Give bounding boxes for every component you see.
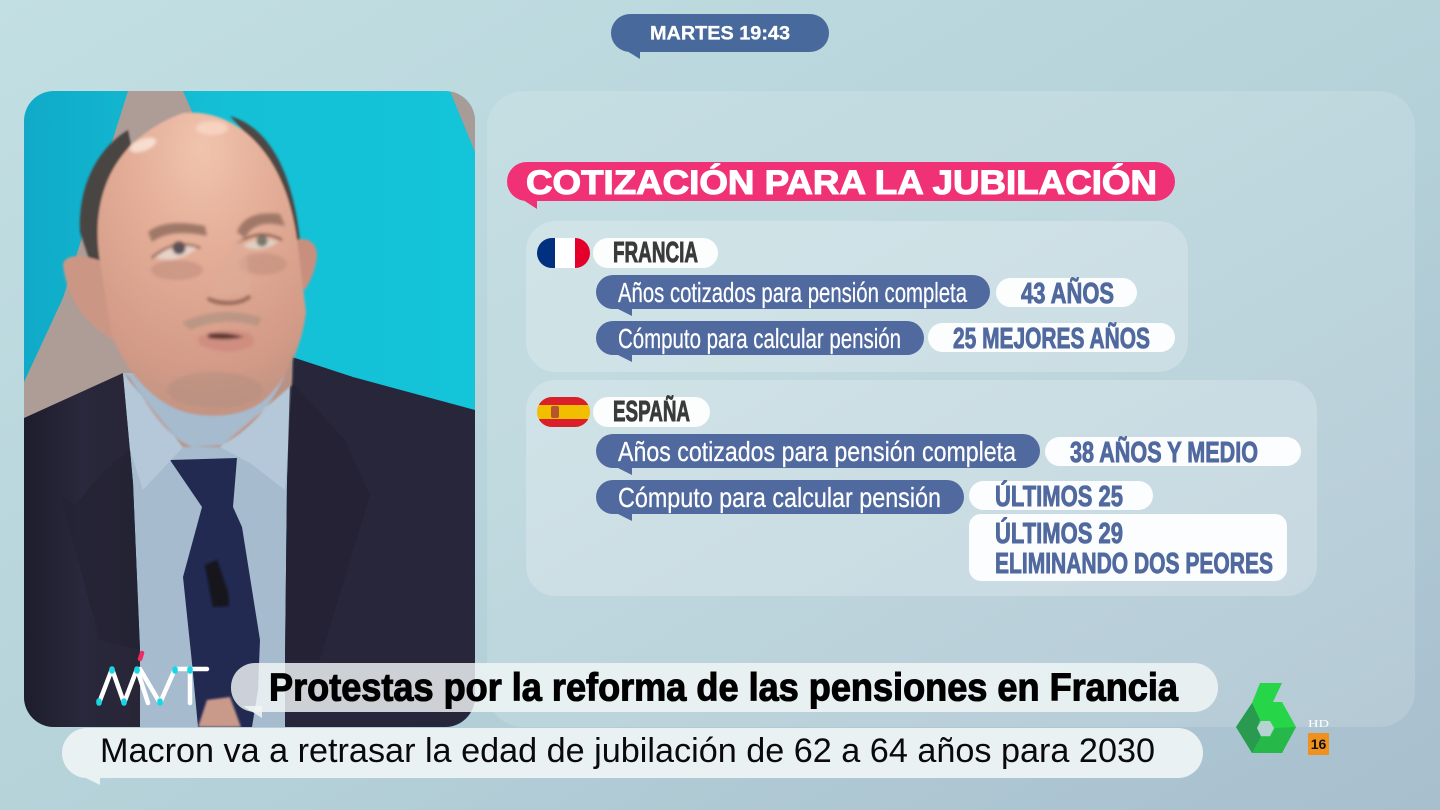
row: cómputo Francia: Cómputo para calcular pensión [618,323,901,354]
icon: French flag [537,238,590,268]
subheadline banner: Macron va a retrasar la edad de jubilación de 62 a 64 años para 2030 [100,732,1155,770]
row: cómputo España [596,480,964,521]
value: últimos 29 eliminando dos peores: ÚLTIMOS 29 [995,516,1123,550]
photo: speaker portrait [24,91,475,727]
country label: España [593,394,710,428]
row: años cotizados Francia: Años cotizados para pensión completa [618,277,967,308]
age rating badge: 16 [1311,736,1326,752]
value: últimos 25: ÚLTIMOS 25 [995,479,1123,513]
icon: channel logo 6 [1236,683,1296,753]
row: cómputo España: Cómputo para calcular pensión [618,482,941,513]
country label: España: ESPAÑA [613,394,690,428]
headline banner: Protestas por la reforma de las pensiones en Francia [269,666,1178,710]
icon: MVT logo [99,653,207,703]
country label: Francia [593,237,718,269]
row: años cotizados España [596,434,1040,475]
icon: Spanish flag [537,397,590,427]
value: últimos 29 eliminando dos peores [969,514,1287,581]
value: últimos 29 eliminando dos peores: ELIMINANDO DOS PEORES [995,548,1273,580]
row: años cotizados Francia [596,275,990,316]
row: años cotizados España: Años cotizados para pensión completa [618,436,1016,467]
row: cómputo Francia [596,321,924,362]
time badge [611,14,829,59]
age rating badge [1308,733,1329,755]
country label: Francia: FRANCIA [613,237,698,269]
value: 25 mejores años: 25 MEJORES AÑOS [953,321,1150,355]
subheadline banner [62,728,1203,785]
title banner: COTIZACIÓN PARA LA JUBILACIÓN [526,164,1157,202]
panel: España [526,380,1317,596]
HD label: HD [1308,719,1330,730]
time badge: MARTES 19:43 [650,24,790,44]
panel: content background [487,91,1415,727]
value: 38 años y medio: 38 AÑOS Y MEDIO [1070,435,1258,469]
panel: Francia [526,221,1188,372]
value: 43 años: 43 AÑOS [1021,276,1114,310]
